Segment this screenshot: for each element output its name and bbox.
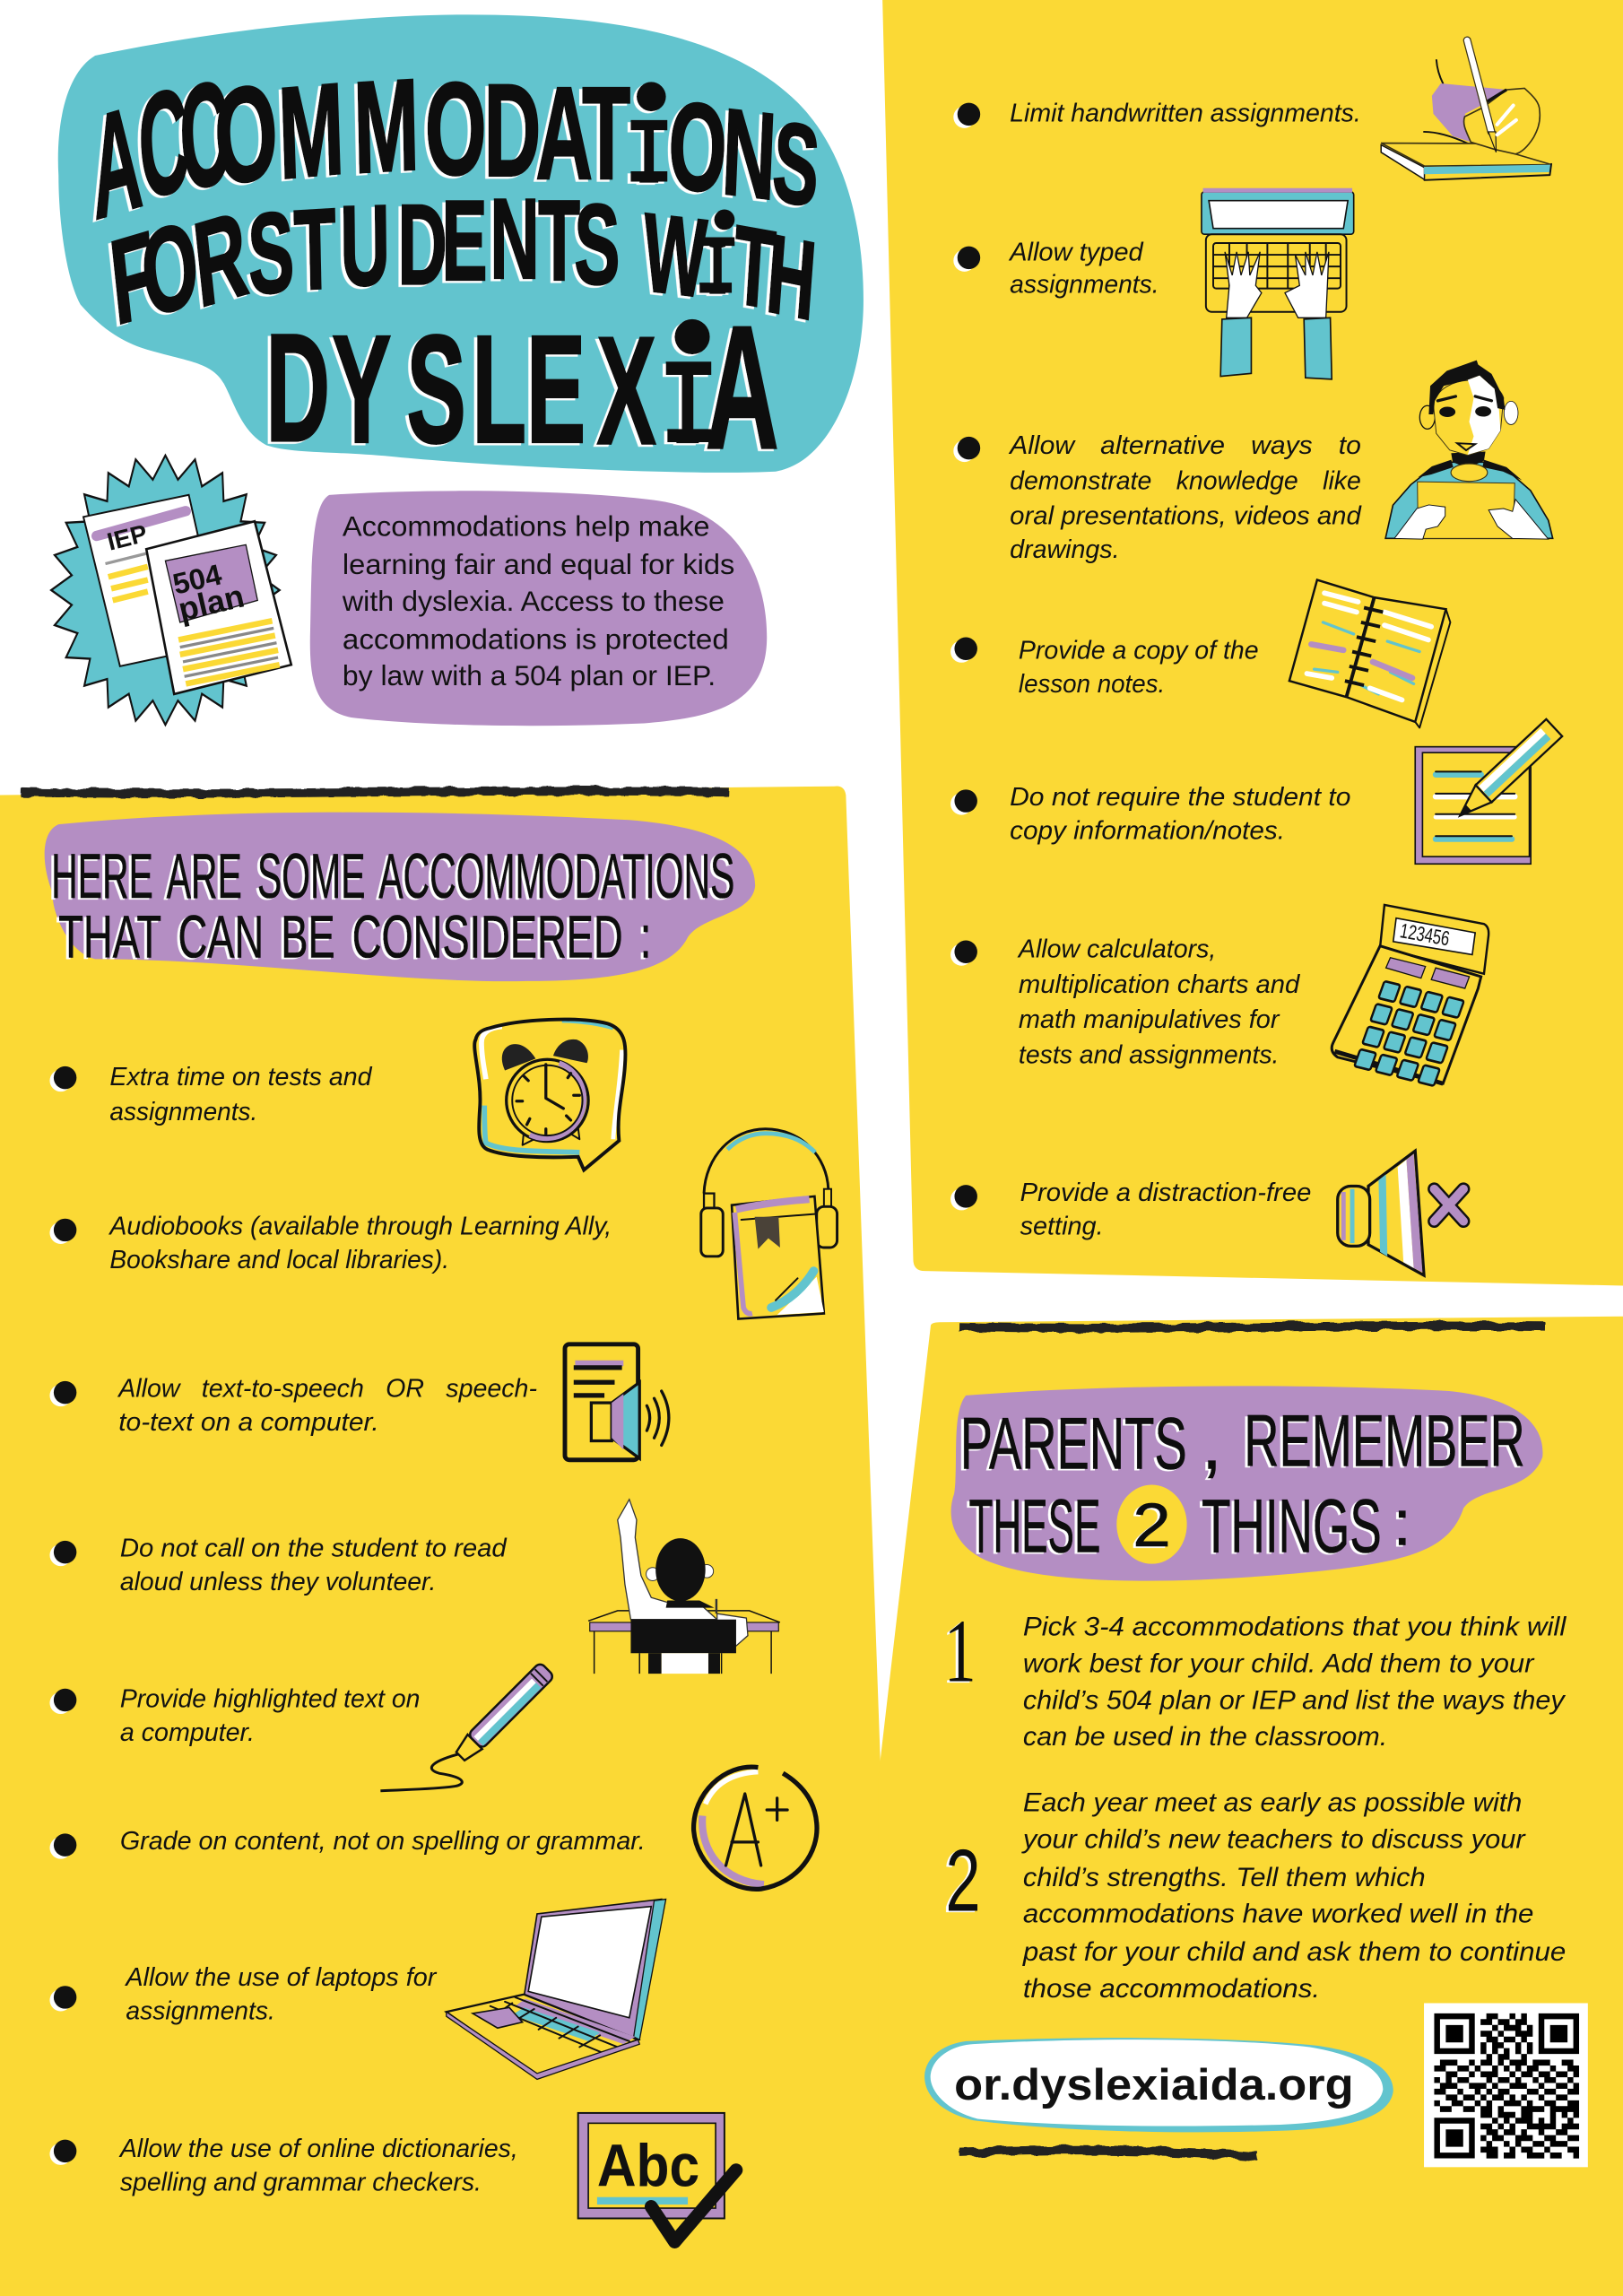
list item: lesson notes: lesson notes. bbox=[1019, 670, 1165, 699]
list item: text to speech bbox=[49, 1375, 537, 1437]
list item: distraction-free: setting. bbox=[1020, 1212, 1104, 1240]
title blob bbox=[58, 14, 864, 473]
title: MM bbox=[276, 53, 421, 207]
list item: calculators: multiplication charts and bbox=[1019, 970, 1300, 999]
list item: extra time: Extra time on tests and bbox=[109, 1063, 373, 1091]
step 2: past for your child and ask them to continue bbox=[1022, 1937, 1566, 1967]
list item: calculators: Allow calculators, bbox=[1017, 935, 1216, 964]
heading: here are some accommodations: HERE ARE SOME ACCOMMODATIONS bbox=[51, 840, 734, 911]
list item: alternative ways: drawings. bbox=[1010, 535, 1120, 564]
list item: audiobooks bbox=[49, 1212, 612, 1274]
title: ODAT bbox=[425, 55, 630, 207]
list item: copy information: copy information/notes. bbox=[1010, 817, 1285, 846]
step 1 bbox=[944, 1600, 1567, 1752]
title: N bbox=[720, 83, 778, 225]
step 2: 2 bbox=[945, 1831, 981, 1930]
list item: highlighted text: Provide highlighted text on bbox=[120, 1685, 420, 1714]
icon: notepad and pencil bbox=[1415, 719, 1562, 864]
icon: Abc board with check mark bbox=[578, 2113, 736, 2242]
title: S bbox=[769, 98, 823, 232]
step 2: child’s strengths. Tell them which bbox=[1023, 1863, 1426, 1892]
list item: alternative ways bbox=[953, 431, 1362, 564]
title: O bbox=[210, 55, 282, 215]
list item: read aloud: aloud unless they volunteer. bbox=[120, 1568, 436, 1596]
title: I bbox=[638, 102, 660, 202]
list item: alternative ways: oral presentations, videos and bbox=[1010, 501, 1362, 530]
icon: hand writing with pencil on book bbox=[1381, 40, 1551, 180]
list item: lesson notes bbox=[950, 637, 1259, 699]
list item: highlighted text bbox=[49, 1685, 420, 1747]
icon: calculator bbox=[1332, 905, 1488, 1086]
callout: intro text: by law with a 504 plan or IEP. bbox=[343, 659, 716, 691]
icon: open spiral notebook bbox=[1289, 580, 1450, 727]
step 1: child’s 504 plan or IEP and list the ways they bbox=[1023, 1685, 1567, 1715]
title: DYSLEX bbox=[265, 301, 656, 476]
title: FOR bbox=[105, 187, 253, 351]
heading: here are some accommodations bbox=[45, 813, 755, 981]
list item: text to speech: to-text on a computer. bbox=[118, 1408, 379, 1437]
list item: read aloud bbox=[49, 1535, 508, 1596]
QR code bbox=[1424, 2003, 1588, 2167]
step 2: accommodations have worked well in the bbox=[1023, 1900, 1533, 1929]
list item: laptops: assignments. bbox=[126, 1996, 275, 2025]
heading: parents remember these 2 things: , bbox=[1202, 1404, 1222, 1485]
list item: laptops bbox=[49, 1963, 438, 2025]
icon: student raising hand at desk bbox=[588, 1500, 780, 1674]
callout: intro text bbox=[310, 491, 767, 726]
icon: 504 plan and IEP documents on starburst: IEP bbox=[104, 519, 150, 556]
icon: 504 plan and IEP documents on starburst: 504 bbox=[169, 557, 224, 601]
icon: document with speaker bbox=[565, 1344, 669, 1460]
icon: open laptop bbox=[447, 1900, 666, 2079]
step 2: those accommodations. bbox=[1023, 1974, 1320, 2004]
step 2 bbox=[945, 1788, 1566, 2004]
step 1: can be used in the classroom. bbox=[1023, 1722, 1387, 1752]
title: W bbox=[641, 189, 709, 321]
list item: calculators: tests and assignments. bbox=[1019, 1040, 1279, 1069]
step 1: work best for your child. Add them to your bbox=[1023, 1648, 1535, 1678]
step 2: Each year meet as early as possible with bbox=[1023, 1788, 1522, 1818]
panel: parents remember bbox=[878, 1317, 1623, 2296]
list item: online dictionaries: spelling and grammar checkers. bbox=[120, 2168, 482, 2196]
list item: typed assignments: assignments. bbox=[1010, 271, 1159, 300]
heading: parents remember these 2 things: : bbox=[1393, 1487, 1411, 1559]
panel: title area bbox=[58, 14, 864, 485]
list item: calculators bbox=[950, 935, 1300, 1069]
list item: text to speech: Allow text-to-speech OR speech- bbox=[117, 1375, 537, 1404]
heading: parents remember these 2 things: 2 bbox=[1133, 1491, 1171, 1560]
list item: online dictionaries: Allow the use of online dictionaries, bbox=[118, 2135, 518, 2163]
list item: distraction-free bbox=[950, 1178, 1311, 1240]
list item: lesson notes: Provide a copy of the bbox=[1019, 637, 1259, 665]
callout: intro text: learning fair and equal for kids bbox=[343, 548, 734, 580]
list item: extra time: assignments. bbox=[109, 1098, 257, 1126]
icon: calculator: 123456 bbox=[1398, 918, 1452, 950]
title: I bbox=[675, 340, 700, 467]
heading: parents remember these 2 things: PARENTS bbox=[960, 1404, 1187, 1485]
icon: highlighter pen with scribble bbox=[380, 1662, 554, 1791]
website link pill: or.dyslexiaida.org bbox=[954, 2061, 1354, 2109]
list item: typed assignments bbox=[953, 239, 1159, 300]
icon: boy holding paper bbox=[1385, 361, 1553, 539]
website link pill bbox=[924, 2038, 1393, 2132]
list item: distraction-free: Provide a distraction-free bbox=[1020, 1178, 1311, 1207]
list item: copy information: Do not require the student to bbox=[1010, 783, 1350, 812]
icon: A plus grade circle bbox=[694, 1767, 817, 1889]
list item: online dictionaries bbox=[49, 2135, 518, 2196]
icon: 504 plan and IEP documents on starburst: plan bbox=[175, 577, 247, 628]
list item: typed assignments: Allow typed bbox=[1008, 239, 1144, 267]
list item: highlighted text: a computer. bbox=[120, 1718, 255, 1747]
heading: parents remember these 2 things bbox=[951, 1386, 1543, 1581]
list item: read aloud: Do not call on the student to read bbox=[120, 1535, 508, 1563]
icon: Abc board with check mark: Abc bbox=[597, 2133, 699, 2200]
list item: extra time bbox=[49, 1063, 373, 1126]
list item: calculators: math manipulatives for bbox=[1019, 1005, 1280, 1034]
title: TH bbox=[730, 201, 820, 344]
heading: parents remember these 2 things: THINGS bbox=[1202, 1483, 1382, 1569]
list item: laptops: Allow the use of laptops for bbox=[124, 1963, 438, 1992]
callout: intro text: with dyslexia. Access to these bbox=[342, 585, 725, 617]
icon: muted speaker bbox=[1338, 1151, 1463, 1275]
icon: hands typing on laptop bbox=[1202, 190, 1354, 379]
panel: accommodations list, left bbox=[0, 787, 881, 2296]
title: STUDENTS bbox=[247, 176, 620, 319]
list item: copy information bbox=[950, 783, 1350, 846]
title: O bbox=[666, 75, 729, 220]
list item: grade on content: Grade on content, not on spelling or grammar. bbox=[120, 1827, 646, 1856]
callout: intro text: Accommodations help make bbox=[343, 510, 710, 543]
title: A bbox=[706, 289, 779, 485]
heading: parents remember these 2 things: THESE bbox=[968, 1483, 1100, 1569]
step 2: your child’s new teachers to discuss your bbox=[1021, 1824, 1526, 1854]
icon: 504 plan and IEP documents on starburst bbox=[51, 456, 291, 725]
heading: here are some accommodations: THAT CAN BE CONSIDERED : bbox=[58, 904, 651, 971]
title: ACC bbox=[86, 49, 234, 251]
callout: intro text: accommodations is protected bbox=[343, 622, 729, 655]
list item: audiobooks: Audiobooks (available through Learning Ally, bbox=[108, 1212, 612, 1240]
icon: headphones and book bbox=[701, 1129, 838, 1319]
list item: audiobooks: Bookshare and local libraries). bbox=[109, 1246, 449, 1274]
list item: alternative ways: Allow alternative ways to bbox=[1008, 431, 1361, 460]
panel: accommodations list, right bbox=[882, 0, 1623, 1285]
list item: limit handwritten: Limit handwritten assignments. bbox=[1010, 100, 1361, 128]
title: I bbox=[708, 227, 726, 310]
step 1: Pick 3-4 accommodations that you think will bbox=[1023, 1613, 1567, 1642]
list item: alternative ways: demonstrate knowledge like bbox=[1010, 466, 1361, 495]
icon: alarm clock in speech bubble bbox=[474, 1020, 626, 1170]
step 1: 1 bbox=[944, 1600, 976, 1700]
title bbox=[86, 49, 823, 485]
